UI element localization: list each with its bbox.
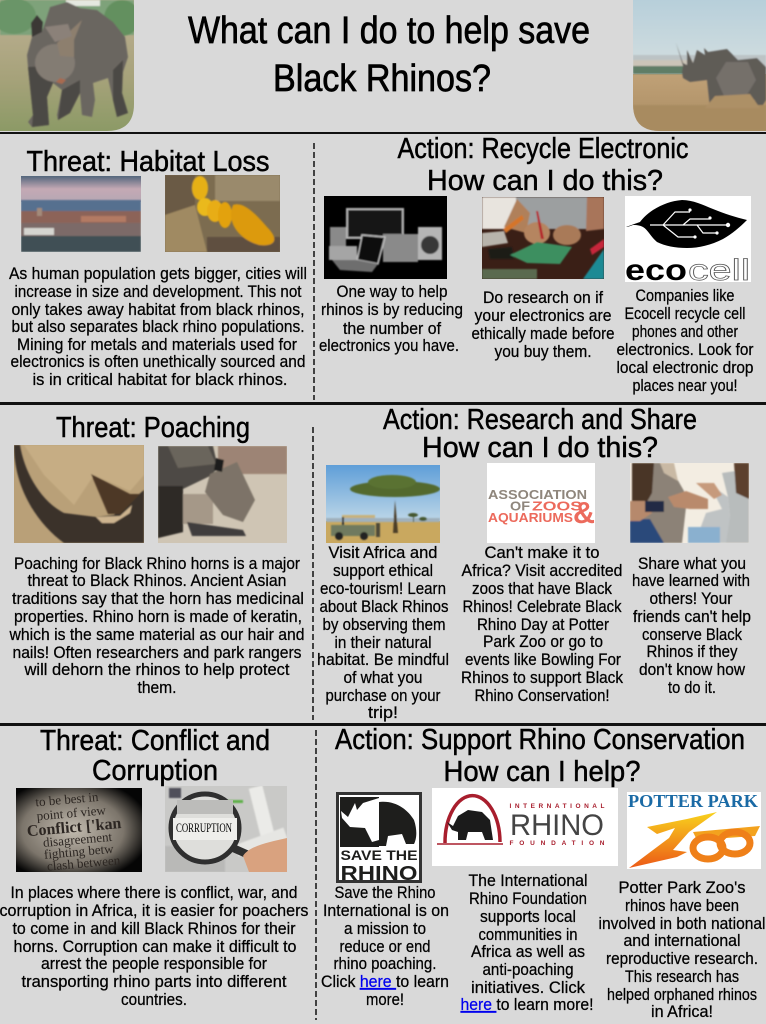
text: potter park zoo: This research has	[625, 968, 739, 986]
text: international rhino foundation	[460, 872, 594, 1014]
text: visit accredited zoos: events like Bowling For	[465, 651, 621, 669]
text: potter park zoo: in Africa!	[651, 1003, 713, 1021]
photo: magnifying glass on corruption: CORRUPTION	[176, 820, 232, 835]
text: conflict explanation: horns. Corruption can make it difficult to	[14, 938, 296, 956]
text: share with friends: Share what you	[638, 555, 746, 573]
heading: conflict and corruption: Threat: Conflict and	[40, 725, 270, 757]
text: share with friends: others! Your	[650, 590, 733, 608]
text: save the rhino: Click here to learn	[321, 973, 449, 991]
logo: international rhino foundation: RHINO	[510, 809, 604, 842]
text: habitat loss explanation	[9, 265, 307, 389]
text: conflict explanation: In places where there is conflict, war, and	[10, 884, 298, 902]
text: habitat loss explanation: As human population gets bigger, cities will	[9, 265, 307, 283]
text: visit accredited zoos: Rhino Day at Potter	[477, 616, 609, 634]
panel: action research and share	[317, 404, 751, 722]
text: habitat loss explanation: only takes away habitat from black rhinos,	[12, 301, 304, 319]
text: conflict explanation	[0, 884, 308, 1009]
text: save the rhino: more!	[366, 991, 404, 1009]
text: conflict explanation: to come in and kill Black Rhinos for their	[12, 920, 296, 938]
text: visit africa: eco-tourism! Learn	[320, 580, 446, 598]
photo: safari jeep and acacia tree	[326, 465, 440, 543]
photo: pile of electronics	[324, 196, 447, 279]
photo: hands soldering circuit board	[482, 197, 604, 279]
text: share with friends: to do it.	[668, 679, 716, 697]
text: conflict explanation: countries.	[121, 991, 187, 1009]
text: visit africa: of what you	[344, 669, 422, 687]
photo: dictionary entry conflict	[16, 788, 142, 874]
text: poaching explanation: threat to Black Rhinos. Ancient Asian	[28, 572, 286, 590]
logo: association of zoos and aquariums: ASSOCIATION	[488, 487, 587, 502]
logo: ecocell	[625, 196, 751, 287]
photo: rhino horns close up	[14, 445, 144, 543]
text: potter park zoo: and international	[624, 932, 740, 950]
photo: dictionary entry conflict: clash between	[46, 852, 121, 874]
text: habitat loss explanation: Mining for metals and materials used for	[17, 336, 297, 354]
text: save the rhino: International is on	[323, 902, 449, 920]
text: ecocell recycling: local electronic drop	[616, 359, 754, 377]
text: reduce electronics: electronics you have.	[319, 337, 459, 355]
text: international rhino foundation: initiatives. Click	[471, 979, 586, 997]
logo: international rhino foundation: INTERNATIONAL	[510, 803, 605, 810]
panel: threat conflict and corruption	[0, 725, 308, 1009]
photo: coastal city	[21, 176, 141, 252]
text: visit africa: about Black Rhinos	[320, 598, 448, 616]
heading: research and share	[383, 404, 697, 464]
text: visit accredited zoos: Park Zoo or go to	[483, 633, 603, 651]
title	[188, 10, 590, 100]
text: poaching explanation: Poaching for Black Rhino horns is a major	[14, 555, 300, 573]
text: international rhino foundation: here to learn more!	[460, 996, 594, 1014]
text: research electronics: ethically made before	[472, 325, 614, 343]
title: Black Rhinos?	[273, 58, 491, 100]
logo: association of zoos and aquariums	[487, 463, 595, 543]
heading: conflict and corruption: Corruption	[92, 755, 218, 787]
text: save the rhino: reduce or end	[340, 938, 430, 956]
photo: dictionary entry conflict: to be best in	[35, 789, 99, 809]
text: visit africa: trip!	[368, 704, 398, 722]
text: poaching explanation: will dehorn the rhinos to help protect	[24, 661, 290, 679]
text: ecocell recycling: phones and other	[632, 323, 738, 341]
heading: research and share: Action: Research and Share	[383, 404, 697, 436]
logo: potter park zoo: POTTER PARK	[628, 791, 758, 811]
text: poaching explanation: nails! Often researchers and park rangers	[12, 644, 302, 662]
heading: recycle electronic	[398, 133, 688, 197]
text: reduce electronics: rhinos is by reducing	[321, 301, 463, 319]
text: visit accredited zoos: Rhinos to support Black	[461, 669, 624, 687]
text: visit africa: by observing them	[322, 616, 446, 634]
text: reduce electronics	[319, 283, 463, 355]
text: share with friends: friends can't help	[633, 608, 751, 626]
text: habitat loss explanation: is in critical habitat for black rhinos.	[32, 371, 288, 389]
text: habitat loss explanation: electronics is often unethically sourced and	[10, 353, 306, 371]
text: visit africa: in their natural	[334, 634, 432, 652]
text: visit accredited zoos: Rhino Conservation!	[474, 687, 610, 705]
text: poaching explanation	[9, 555, 304, 697]
text: ecocell recycling: places near you!	[632, 377, 738, 395]
text: share with friends: have learned with	[632, 572, 750, 590]
text: visit africa: purchase on your	[326, 687, 441, 705]
text: save the rhino: rhino poaching.	[334, 955, 436, 973]
logo: ecocell: cell	[688, 254, 750, 287]
text: habitat loss explanation: increase in size and development. This not	[14, 283, 302, 301]
heading: research and share: How can I do this?	[422, 432, 658, 464]
logo: ecocell: eco	[625, 254, 687, 287]
logo: potter park zoo	[627, 791, 761, 869]
heading: conflict and corruption	[40, 725, 270, 787]
logo: save the rhino	[336, 792, 422, 885]
text: visit africa: Visit Africa and	[328, 544, 438, 562]
text: visit africa: support ethical	[333, 562, 433, 580]
photo: magnifying glass on corruption	[165, 786, 287, 872]
logo: save the rhino: SAVE THE	[340, 848, 418, 863]
text: habitat loss explanation: but also separates black rhino populations.	[12, 318, 304, 336]
text: potter park zoo: Potter Park Zoo's	[618, 879, 746, 897]
text: international rhino foundation: anti-poaching	[482, 961, 574, 979]
photo: dictionary entry conflict: fighting betw	[43, 841, 115, 862]
text: research electronics	[472, 289, 614, 361]
logo: save the rhino: RHINO	[340, 863, 418, 885]
logo: association of zoos and aquariums: ZOOS	[532, 498, 582, 514]
text: save the rhino: Save the Rhino	[334, 884, 436, 902]
heading: recycle electronic: Action: Recycle Electronic	[398, 133, 688, 165]
logo: association of zoos and aquariums: OF	[510, 498, 530, 514]
text: visit africa	[317, 544, 449, 722]
text: poaching explanation: which is the same material as our hair and	[9, 626, 304, 644]
panel: threat poaching	[9, 412, 304, 697]
text: visit accredited zoos: Africa? Visit accredited	[462, 562, 622, 580]
text: save the rhino: a mission to	[344, 920, 426, 938]
text: international rhino foundation: supports local	[480, 908, 576, 926]
text: research electronics: Do research on if	[483, 289, 603, 307]
text: share with friends	[632, 555, 751, 697]
text: conflict explanation: transporting rhino parts into different	[22, 973, 287, 991]
text: conflict explanation: arrest the people responsible for	[41, 955, 267, 973]
panel: action recycle electronics	[319, 133, 754, 395]
text: international rhino foundation: communities in	[478, 926, 578, 944]
text: ecocell recycling: Companies like	[636, 287, 734, 305]
title: What can I do to help save	[188, 10, 590, 52]
text: reduce electronics: the number of	[343, 320, 441, 338]
photo: dictionary entry conflict: point of view	[36, 802, 107, 823]
text: poaching explanation: properties. Rhino horn is made of keratin,	[14, 608, 302, 626]
photo: dictionary entry conflict: Conflict ['kan	[26, 815, 122, 840]
header banner	[0, 0, 766, 131]
text: research electronics: your electronics are	[474, 307, 612, 325]
heading: habitat loss: Threat: Habitat Loss	[26, 146, 270, 178]
text: potter park zoo: reproductive research.	[606, 950, 758, 968]
text: visit accredited zoos: Can't make it to	[484, 544, 600, 562]
photo: dehorned rhino	[158, 446, 287, 543]
text: visit africa: habitat. Be mindful	[317, 651, 449, 669]
logo: international rhino foundation: FOUNDATION	[510, 840, 605, 847]
text: poaching explanation: them.	[138, 679, 176, 697]
text: poaching explanation: traditions say that the horn has medicinal	[12, 590, 304, 608]
heading: support rhino conservation: How can I help?	[444, 756, 640, 788]
photo: black rhino in savanna	[633, 0, 766, 131]
text: ecocell recycling: electronics. Look for	[616, 341, 754, 359]
text: ecocell recycling	[616, 287, 754, 395]
photo: dictionary entry conflict: disagreement	[42, 829, 113, 850]
text: ecocell recycling: Ecocell recycle cell	[624, 305, 746, 323]
panel: threat habitat loss	[9, 146, 307, 389]
text: international rhino foundation: The International	[468, 872, 588, 890]
photo: mine tunnel with hard hats	[165, 175, 280, 252]
text: share with friends: don't know how	[639, 661, 745, 679]
photo: black rhino facing viewer	[0, 0, 140, 131]
text: reduce electronics: One way to help	[336, 283, 448, 301]
text: research electronics: you buy them.	[494, 343, 592, 361]
text: visit accredited zoos: Rhinos! Celebrate Black	[462, 598, 622, 616]
text: potter park zoo: rhinos have been	[625, 897, 739, 915]
heading: support rhino conservation	[335, 724, 745, 788]
logo: association of zoos and aquariums: &	[573, 495, 595, 530]
text: international rhino foundation: Africa as well as	[471, 943, 585, 961]
text: visit accredited zoos: zoos that have Black	[472, 580, 613, 598]
text: potter park zoo	[598, 879, 766, 1021]
text: visit accredited zoos	[461, 544, 624, 705]
logo: international rhino foundation	[432, 788, 618, 866]
panel: action support rhino conservation	[321, 724, 766, 1021]
heading: poaching: Threat: Poaching	[56, 412, 250, 444]
text: share with friends: Rhinos if they	[646, 643, 738, 661]
text: share with friends: conserve Black	[642, 626, 743, 644]
heading: recycle electronic: How can I do this?	[427, 165, 663, 197]
photo: friends talking	[630, 463, 749, 543]
text: save the rhino	[321, 884, 449, 1009]
text: conflict explanation: corruption in Africa, it is easier for poachers	[0, 902, 308, 920]
logo: association of zoos and aquariums: AQUARIUMS	[488, 510, 573, 525]
text: international rhino foundation: Rhino Foundation	[469, 890, 587, 908]
